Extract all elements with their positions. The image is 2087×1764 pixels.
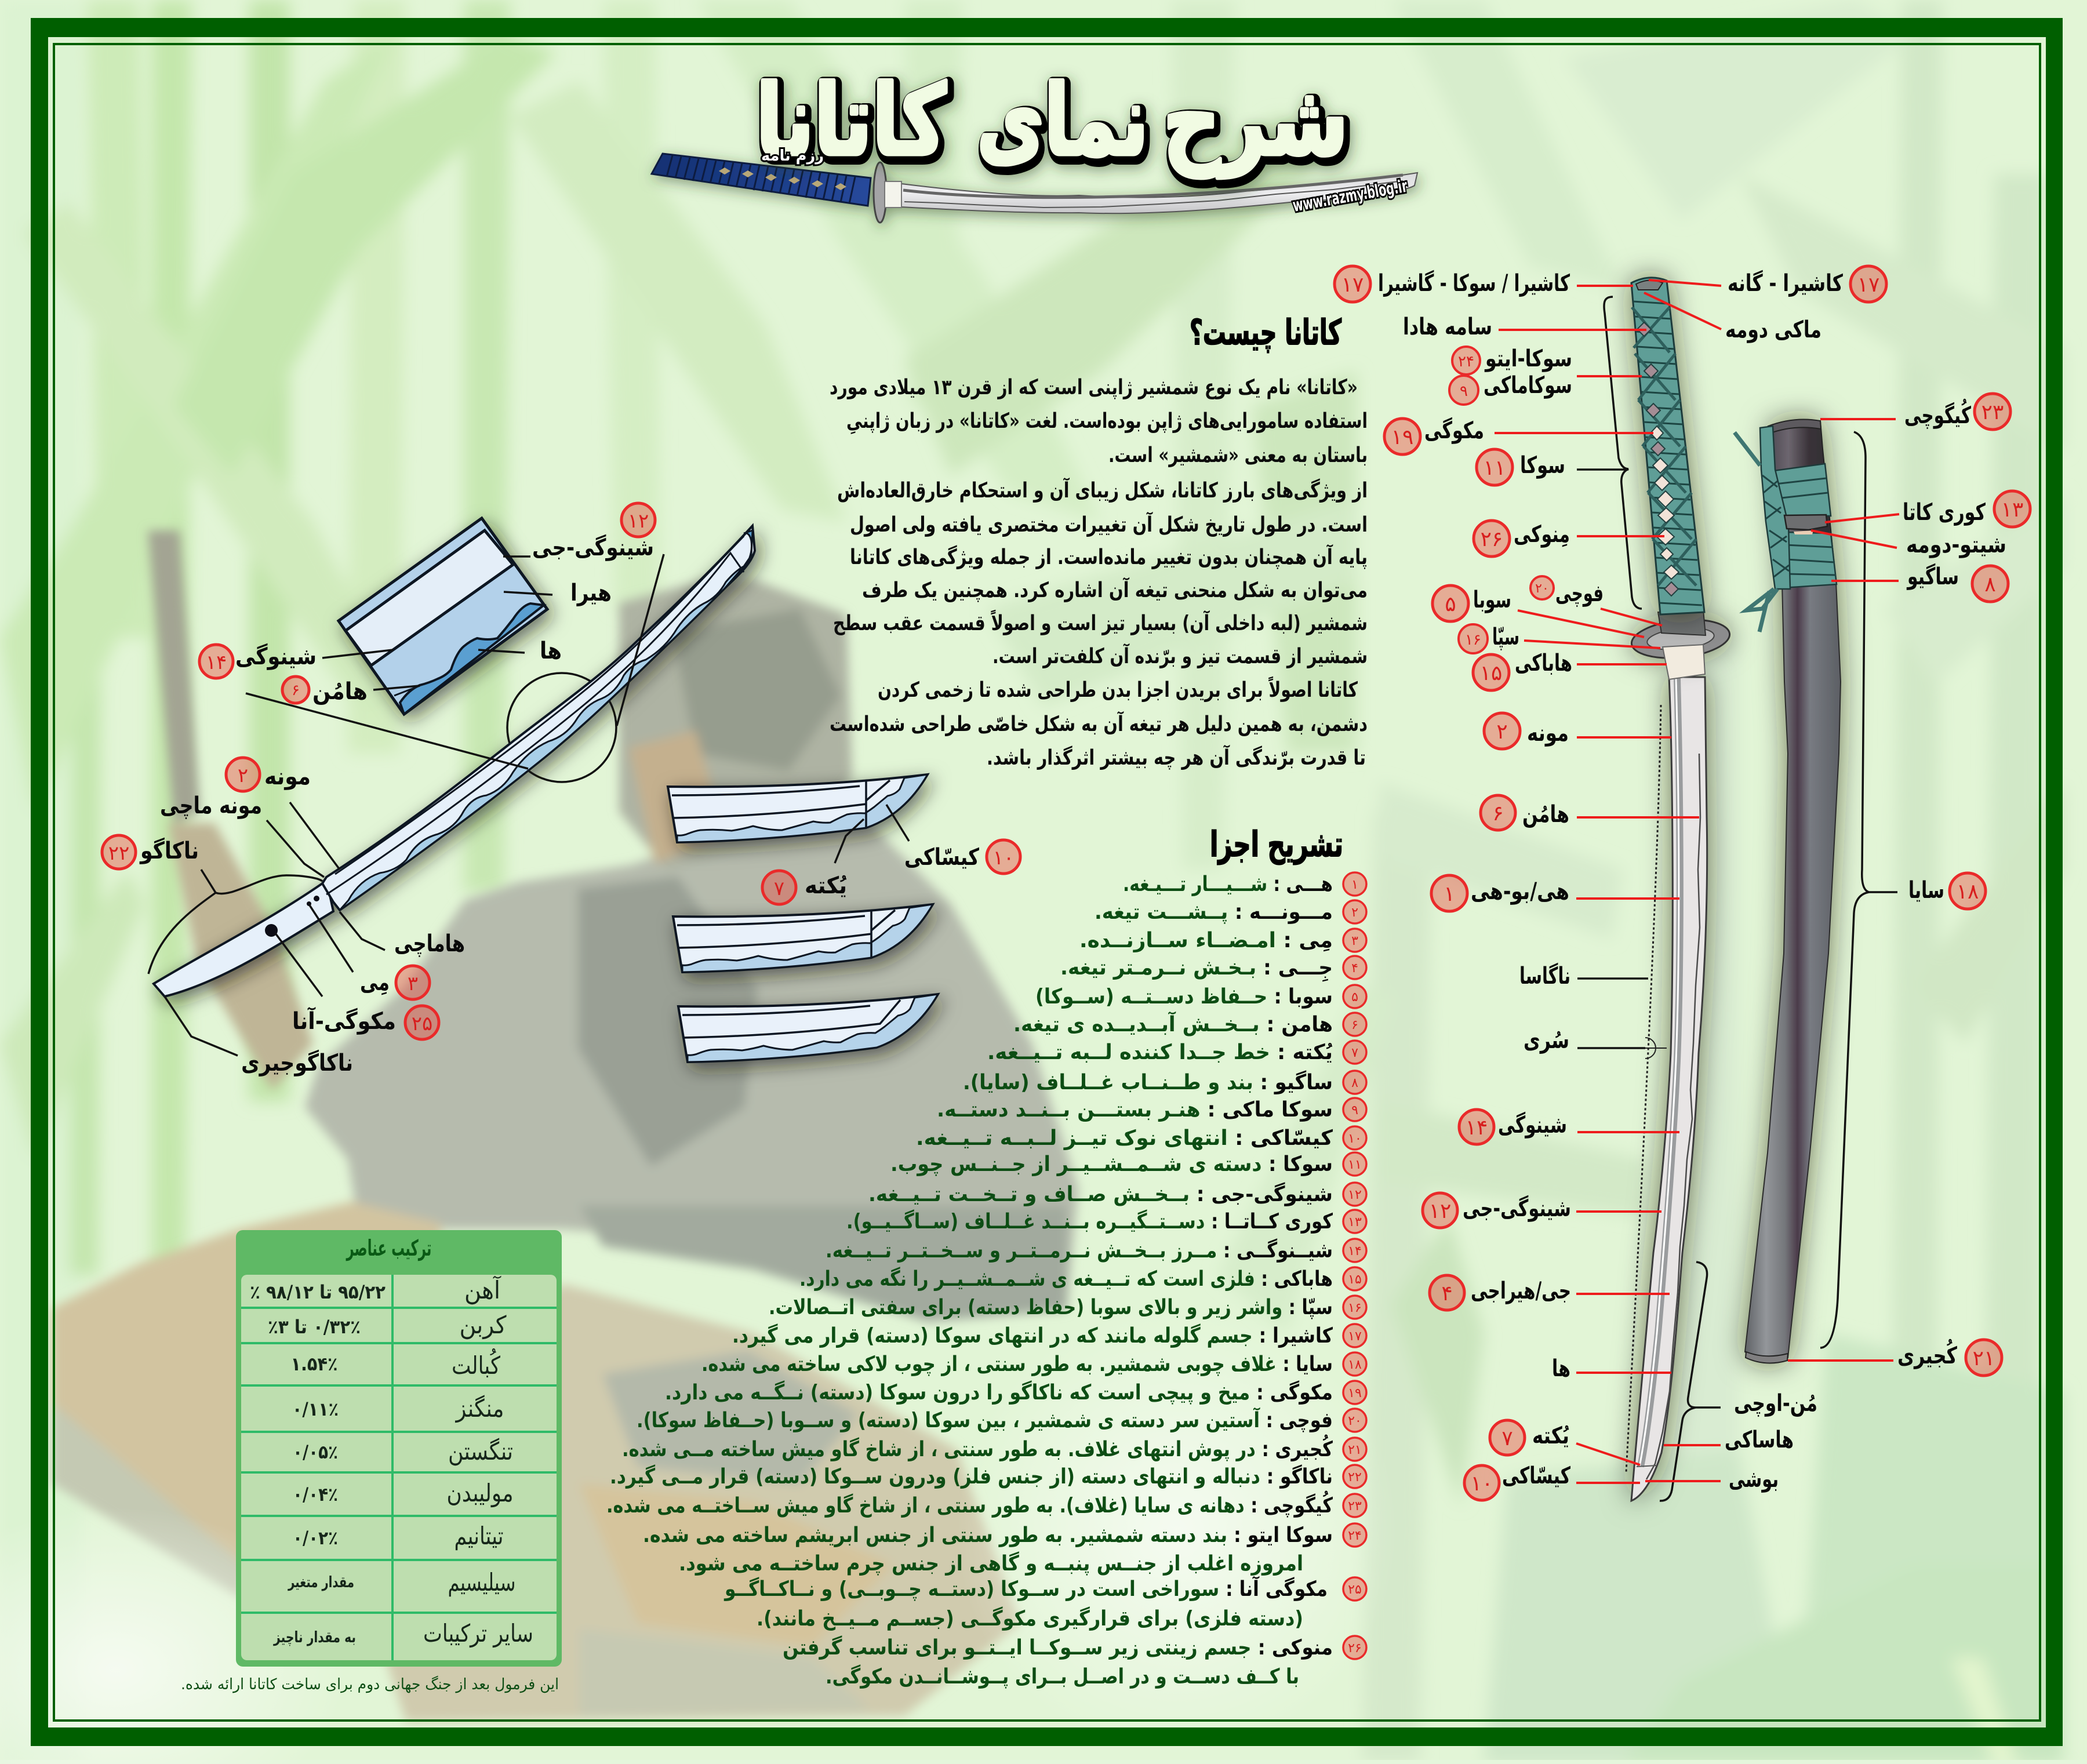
table rows: ۰/۳۲٪ تا ۳٪ <box>268 1316 361 1338</box>
table rows: به مقدار ناچیز <box>272 1629 356 1646</box>
kissaki blade 1 <box>668 774 928 842</box>
table rows: کُبالت <box>452 1348 500 1380</box>
label: mekugi 19 <box>1384 417 1484 454</box>
table rows: ۰/۱۱٪ <box>292 1398 339 1420</box>
diagram: tang and blade anatomy (left) <box>102 503 755 1076</box>
label: kissaki 10 right: ۱۰ <box>1471 1472 1493 1496</box>
label: mune machi: مونه ماچی <box>160 792 262 819</box>
parts list: سوکا ماکی : هنـر بستـــن بــنــد دستــه. <box>937 1098 1333 1122</box>
paragraph: what is katana: باستان به معنی «شمشیر» است. <box>1108 443 1368 467</box>
parts list: کیسّاکی : انتهای نوک تیــز لــبــه تــیــغه. <box>916 1126 1333 1150</box>
number badges column: ۲۳ <box>1348 1499 1362 1514</box>
label: menuki 26: مِنوکی <box>1514 521 1570 548</box>
label: shinogi 14 right: شینوگی <box>1498 1111 1567 1139</box>
parts list: سایا : غلاف چوبی شمشیر. به طور سنتی ، از چوب لاکی ساخته می شده. <box>701 1352 1333 1376</box>
label: habaki 15 <box>1473 650 1572 690</box>
parts list: کُیگوچی : دهانه ی سایا (غلاف). به طور سنتی ، از شاخ گاو میش ســاختــه می شده. <box>606 1490 1333 1518</box>
number badges column: ۱۴ <box>1348 1244 1362 1259</box>
background: white fade lower left <box>0 1507 348 1764</box>
title sword: blade <box>901 173 1417 213</box>
parts list <box>606 872 1366 1689</box>
label: tsuka-ito 24: سوکا-ایتو <box>1484 345 1572 372</box>
title sword: collar <box>885 181 901 208</box>
title: کاتانا <box>756 64 946 177</box>
paragraph: what is katana: شمشیر (لبه داخلی آن) بسیار تیز است و اصولاً قسمت عقب سطح <box>833 610 1368 635</box>
parts list: مکوگی آنا : سوراخی است در ســوکا (دستــه چــوبــی) و نــاکــاگــو <box>723 1576 1328 1601</box>
label: habaki 15: ۱۵ <box>1480 661 1502 685</box>
number badges column: ۲۱ <box>1348 1443 1362 1457</box>
label: kashira 17 left: ۱۷ <box>1341 273 1364 297</box>
label: mune 2 right: ۲ <box>1496 720 1508 744</box>
label: shinogi 14: ۱۴ <box>206 651 227 674</box>
label: sageo 8 <box>1907 563 2008 602</box>
katana nagasa dotted line <box>1626 705 1661 1472</box>
parts list: کاشیرا : جسم گلوله مانند که در انتهای سوکا (دسته) قرار می گیرد. <box>732 1323 1333 1348</box>
number badges column: ۶ <box>1351 1018 1358 1032</box>
parts list: سپّا : واشر زیر و بالای سوبا (حفاظ دسته) برای سفتی اتــصالات. <box>769 1296 1333 1319</box>
number badges column: ۹ <box>1351 1103 1358 1118</box>
label: hamachi: هاماچی <box>394 930 465 957</box>
background: white fade right of figure <box>957 1304 1397 1756</box>
title sword: handle wrap <box>667 155 855 203</box>
label: fuchi 20 <box>1530 576 1604 607</box>
table rows: ۹۵/۲۲ تا ۹۸/۱۲ ٪ <box>250 1281 386 1303</box>
number badges column <box>1343 872 1366 1659</box>
label: mon-uchi: مُن-اوچی <box>1734 1390 1817 1417</box>
table rows: آهن <box>464 1275 501 1304</box>
scabbard sageo cord <box>1735 426 1837 632</box>
title sword: blue handle <box>652 154 871 206</box>
parts list: کُجیری : در پوش انتهای غلاف. به طور سنتی ، از شاخ گاو میش ساخته مــی شده. <box>622 1434 1333 1461</box>
parts list: هامن : بــخــش آبــدیــده ی تیغه. <box>1013 1011 1333 1036</box>
paragraph: what is katana: از ویژگی‌های بارز کاتانا، شکل زیبای آن و استحکام خارق‌العاده‌اش <box>837 477 1368 503</box>
label: shinogi-ji 12: ۱۲ <box>628 510 649 533</box>
label: nakago 22 <box>102 835 199 869</box>
label: mekugi-ana 25 <box>292 1006 439 1039</box>
diagram: full katana with parts (right) <box>1335 266 2030 1501</box>
parts list: جِـــی : بـخـش نــرمـتر تیغه. <box>1060 956 1333 981</box>
number badges column: ۲۵ <box>1348 1583 1362 1597</box>
diagram: kissaki tips <box>668 774 1020 1062</box>
label: mune 2 right <box>1484 713 1569 749</box>
table rows: ۰/۰۲٪ <box>293 1527 338 1549</box>
label: shinogi 14 right: ۱۴ <box>1466 1116 1488 1140</box>
parts list: کوری کــاتــا : دســتــگیــره بــنــد غــلــاف (ســاگــیــو). <box>846 1209 1333 1234</box>
kissaki leaders <box>835 805 909 863</box>
number badges column: ۱۶ <box>1348 1301 1362 1315</box>
label: yokote 7 right: ۷ <box>1501 1427 1513 1450</box>
number badges column: ۴ <box>1351 961 1358 976</box>
table rows: ۰/۰۵٪ <box>293 1441 338 1463</box>
title: نمای <box>977 64 1148 177</box>
label: shinogi-ji 12 right <box>1423 1193 1571 1228</box>
katana guard tsuba <box>1630 615 1732 663</box>
table: element composition <box>236 1230 562 1667</box>
red leader lines <box>1495 280 1899 1483</box>
table rows: کربن <box>459 1311 507 1339</box>
label: shinogi-ji 12 right: شینوگی-جی <box>1463 1195 1571 1222</box>
label: tsuba 5: سوبا <box>1473 587 1511 613</box>
label: hamon 6: ۶ <box>292 682 300 699</box>
title sword: guard <box>874 162 886 223</box>
number badges column: ۱۹ <box>1348 1386 1362 1401</box>
title: نمای <box>979 67 1151 181</box>
label: hasaki: هاساکی <box>1725 1427 1794 1453</box>
label: sori: سُری <box>1524 1027 1569 1054</box>
label: kashira-gane 17 <box>1728 266 1886 302</box>
label: shinogi 14: شینوگی <box>235 643 317 670</box>
number badges column: ۱۳ <box>1348 1215 1362 1230</box>
site name small: رزم نامه <box>761 147 824 165</box>
long blade with tang <box>154 526 755 996</box>
label: ha 1: هی/بو-هی <box>1471 878 1569 905</box>
background: faded samurai figure <box>52 530 1078 1722</box>
label: nagasa: ناگاسا <box>1519 962 1570 990</box>
number badges column: ۱۸ <box>1348 1358 1362 1372</box>
label: mekugi-ana 25: ۲۵ <box>412 1012 432 1035</box>
title: کاتانا <box>758 67 948 181</box>
label: same hada: سامه هادا <box>1403 314 1492 340</box>
katana handle tsuka <box>1631 278 1704 614</box>
label: kojiri 21: کُجیری <box>1897 1339 1958 1369</box>
label: kurikata 13: ۱۳ <box>2001 498 2023 522</box>
number badges column: ۲ <box>1351 905 1358 920</box>
number badges column: ۷ <box>1351 1046 1358 1060</box>
label: tsuka-ito 24 <box>1452 345 1572 374</box>
label: kashira-gane 17: ۱۷ <box>1857 273 1879 297</box>
parts list: ناکاگو : دنباله و انتهای دسته (از جنس فلز) ودرون ســوکا (دسته) قرار مــی گیرد. <box>610 1464 1333 1489</box>
sori arc mark <box>1645 1038 1667 1059</box>
label: menuki 26 <box>1474 521 1570 557</box>
title <box>756 64 1351 181</box>
table rows: سایر ترکیبات <box>423 1619 533 1647</box>
parts list: سوبا : حــفاظ دســتــه (ســوکا) <box>1035 985 1333 1009</box>
label: tsuka 11: سوکا <box>1520 452 1565 479</box>
label: kashira 17 left: کاشیرا / سوکا - گاشیرا <box>1378 270 1570 297</box>
title sword: diamonds <box>719 168 846 190</box>
paragraph: what is katana <box>830 376 1368 770</box>
table rows: مولیبدن <box>446 1479 514 1507</box>
paragraph: what is katana: پایه آن همچنان بدون تغییر مانده‌است. از جمله ویژگی‌های کاتانا <box>850 544 1368 569</box>
table heading: ترکیب عناصر <box>346 1235 431 1261</box>
number badges column: ۸ <box>1351 1076 1358 1090</box>
number badges column: ۳ <box>1351 934 1358 948</box>
paragraph: what is katana: شمشیر از قسمت تیز و برّنده آن کلفت‌تر است. <box>992 643 1368 668</box>
label: mei 3: ۳ <box>408 972 418 995</box>
number badges column: ۲۲ <box>1348 1470 1362 1485</box>
label: hamon 6 right: هامُن <box>1522 801 1569 828</box>
table rows: منگنز <box>455 1394 504 1423</box>
label: tsuba 5: ۵ <box>1445 592 1456 616</box>
parts list: شیــنوگــی : مــرز بــخــش نــرمــتــر و ســخــتــر تــیــغه. <box>826 1238 1333 1263</box>
label: hamon 6: هامُن <box>312 678 368 705</box>
heading: what is katana: کاتانا چیست؟ <box>1190 312 1341 353</box>
number badges column: ۲۶ <box>1348 1641 1362 1656</box>
label: hamon 6 right <box>1481 795 1569 830</box>
table rows: مقدار متغیر <box>287 1574 354 1591</box>
parts list: مـــونـــه : پــشـــت تیغه. <box>1095 900 1333 924</box>
number badges column: ۱۰ <box>1348 1132 1362 1146</box>
label: shinogi-ji 12: شینوگی-جی <box>532 534 654 561</box>
label: mekugi 19: ۱۹ <box>1391 425 1413 449</box>
parts list: مِی : امـضــاء ســازنــده. <box>1079 929 1333 952</box>
label: kissaki 10 right <box>1464 1463 1571 1500</box>
site url: www.razmy.blog.ir <box>1291 176 1409 216</box>
label: nakago 22: ۲۲ <box>108 842 129 865</box>
label: fuchi 20: ۲۰ <box>1535 581 1549 596</box>
label: ha right: ها <box>1552 1355 1570 1382</box>
table rows <box>250 1275 533 1647</box>
label: yokote 7: یُکته <box>805 872 847 899</box>
label: tsukamaki 9 <box>1449 372 1572 405</box>
paragraph: what is katana: می‌توان به شکل منحنی تیغه آن اشاره کرد. همچنین یک طرف <box>862 577 1368 602</box>
label: mei 3: مِی <box>360 969 390 996</box>
label: kissaki 10: کیسّاکی <box>904 844 980 871</box>
heading: parts description: تشریح اجزا <box>1210 824 1343 865</box>
label: koiguchi 23: ۲۳ <box>1981 401 2004 424</box>
parts list: ساگیو : بند و طــنــاب غــلــاف (سایا). <box>963 1070 1333 1094</box>
label: kojiri 21: ۲۱ <box>1973 1347 1995 1370</box>
label: saya 18 <box>1908 873 1986 909</box>
label: yokote 7 <box>762 871 847 904</box>
label: tsuka-ito 24: ۲۴ <box>1458 353 1474 370</box>
label: saya 18: ۱۸ <box>1957 880 1979 904</box>
label: kashira 17 left <box>1335 266 1570 302</box>
label: nakago-jiri: ناکاگوجیری <box>241 1049 353 1076</box>
label: kojiri 21 <box>1897 1339 2002 1376</box>
parts list: فوچی : آستین سر دسته ی شمشیر ، بین سوکا (دسته) و ســوبا (حــفاظ سوکا). <box>637 1407 1333 1432</box>
label: ji 4 <box>1430 1275 1571 1310</box>
label: seppa 16: سپّا <box>1492 624 1519 650</box>
label: mune 2: مونه <box>264 763 311 790</box>
table footnote: این فرمول بعد از جنگ جهانی دوم برای ساخت کاتانا ارائه شده. <box>181 1675 559 1693</box>
label: sageo 8: ۸ <box>1984 573 1996 597</box>
table rows: تیتانیم <box>455 1522 503 1551</box>
scabbard saya <box>1745 419 1841 1363</box>
title: شرح <box>1165 67 1351 181</box>
label: mei 3 <box>360 966 430 999</box>
magnifier circle <box>507 673 616 782</box>
table inner panel <box>241 1275 557 1660</box>
label: koiguchi 23: کُیگوچی <box>1904 398 1972 429</box>
label: boshi: بوشی <box>1729 1466 1779 1493</box>
parts list: (دسته فلزی) برای قرارگیری مکوگــی (جســم مــیــخ مانند). <box>757 1606 1303 1631</box>
label: kissaki 10: ۱۰ <box>993 846 1014 870</box>
number badges column: ۲۴ <box>1348 1529 1362 1543</box>
label: ji 4: ۴ <box>1441 1282 1453 1305</box>
label: tsuba 5 <box>1432 585 1511 621</box>
title sword illustration <box>652 154 1417 223</box>
label: kashira-gane 17: کاشیرا - گانه <box>1728 270 1844 297</box>
label: tsukamaki 9: ۹ <box>1460 383 1468 400</box>
table grid <box>241 1275 557 1660</box>
label: nakago 22: ناکاگو <box>139 837 199 864</box>
katana fuchi collar <box>1658 610 1706 635</box>
paragraph: what is katana: است. در طول تاریخ شکل آن تغییرات مختصری یافته ولی اصول <box>850 511 1368 537</box>
number badges column: ۱۷ <box>1348 1329 1362 1344</box>
paragraph: what is katana: استفاده سامورایی‌های ژاپن بوده‌است. لغت «کاتانا» در زبان ژاپنیِ <box>846 409 1368 434</box>
table rows: سیلیسیم <box>448 1568 516 1597</box>
label: mune 2 <box>226 758 311 791</box>
parts list: شینوگی-جی : بــخــش صــاف و تــخــت تــیــغه. <box>868 1182 1333 1206</box>
label: menuki 26: ۲۶ <box>1481 528 1503 551</box>
paragraph: what is katana: تا قدرت برّندگی آن هر چه بیشتر اثرگذار باشد. <box>987 744 1366 770</box>
label: fuchi 20: فوچی <box>1555 580 1604 607</box>
number badges column: ۱۱ <box>1348 1158 1362 1172</box>
label: tsukamaki 9: سوکاماکی <box>1484 372 1572 399</box>
label: kissaki 10 right: کیسّاکی <box>1502 1463 1571 1489</box>
label: kurikata 13 <box>1903 491 2030 527</box>
paragraph: what is katana: کاتانا اصولاً برای بریدن اجزا بدن طراحی شده تا زخمی کردن <box>878 676 1358 702</box>
parts list: با کــف دســت و در اصــل بــرای پــوشــانــدن مکوگی. <box>826 1664 1299 1689</box>
label: hira: هیرا <box>570 580 612 606</box>
label: saya 18: سایا <box>1908 877 1944 904</box>
label: shinogi 14 <box>199 643 317 678</box>
label: sageo 8: ساگیو <box>1907 563 1959 590</box>
label: yokote 7 right: یُکته <box>1532 1423 1569 1449</box>
label: mune 2 right: مونه <box>1527 720 1569 747</box>
table rows: ۰/۰۴٪ <box>293 1483 338 1505</box>
label: mekugi-ana 25: مکوگی-آنا <box>292 1006 396 1035</box>
number badges column: ۱۲ <box>1348 1188 1362 1202</box>
label: hamon 6 <box>282 676 368 705</box>
parts list: هاباکی : فلزی است که تــیــغه ی شــمــشــیــر را نگه می دارد. <box>799 1267 1333 1291</box>
kissaki blade 3 <box>678 994 938 1062</box>
label: yokote 7: ۷ <box>774 877 784 900</box>
parts list: یُکته : خط جــدا کننده لــبه تــیــغه. <box>987 1041 1333 1064</box>
label: kissaki 10 <box>904 840 1020 874</box>
label: mune 2: ۲ <box>238 764 248 787</box>
label: shitodome: شیتو-دومه <box>1906 532 2006 558</box>
parts list: هـــی : شـــیـــار تـــیـغه. <box>1123 872 1333 896</box>
label: shinogi 14 right <box>1459 1110 1567 1144</box>
katana habaki collar <box>1663 645 1705 679</box>
katana blade <box>1631 677 1707 1501</box>
number badges column: ۵ <box>1351 990 1358 1005</box>
label: seppa 16: ۱۶ <box>1465 631 1481 649</box>
parts list: منوکی : جسم زینتی زیر ســوکــا ایــتــو برای تناسب گرفتن <box>783 1635 1333 1660</box>
parts list: مکوگی : میخ و پیچی است که ناکاگو را درون سوکا (دسته) نــگــه می دارد. <box>665 1380 1333 1405</box>
number badges column: ۱ <box>1351 878 1358 892</box>
label: tsuka 11 <box>1477 449 1565 485</box>
label: ha: ها <box>540 638 562 664</box>
kissaki blade 2 <box>673 904 933 972</box>
table outer panel <box>236 1230 562 1667</box>
paragraph: what is katana: «کاتانا» نام یک نوع شمشیر ژاپنی است که از قرن ۱۳ میلادی مورد <box>830 376 1358 399</box>
table rows: تنگستن <box>448 1437 513 1465</box>
label: habaki 15: هاباکی <box>1515 650 1572 676</box>
title: شرح <box>1163 64 1348 178</box>
number badges column: ۲۰ <box>1348 1414 1362 1428</box>
label: kurikata 13: کوری کاتا <box>1903 499 1986 526</box>
parts list: سوکا : دسته ی شــمــشــیــر از جــنــس چوب. <box>890 1152 1333 1176</box>
parts list: سوکا ایتو : بند دسته شمشیر. به طور سنتی از جنس ابریشم ساخته می شده. <box>643 1523 1333 1547</box>
leader lines <box>148 554 664 1056</box>
label: ha 1: ۱ <box>1444 882 1455 906</box>
label: ha 1 <box>1431 875 1569 911</box>
table rows: ۱.۵۴٪ <box>291 1353 337 1375</box>
label: ji 4: جی/هیراجی <box>1471 1278 1571 1304</box>
blade detail box <box>339 518 547 714</box>
number badges column: ۱۵ <box>1348 1272 1362 1287</box>
title sword: groove and hamon <box>903 175 1403 198</box>
braces and black leaders <box>1577 297 1897 1501</box>
paragraph: what is katana: دشمن، به همین دلیل هر تیغه آن به شکل خاصّی طراحی شده‌است <box>830 711 1368 736</box>
label: mekugi 19: مکوگی <box>1424 417 1484 444</box>
label: hamon 6 right: ۶ <box>1492 802 1504 825</box>
label: koiguchi 23 <box>1904 394 2010 430</box>
label: yokote 7 right <box>1490 1420 1569 1455</box>
label: shinogi-ji 12 <box>532 503 655 561</box>
label: seppa 16 <box>1459 624 1519 653</box>
parts list: امروزه اغلب از جنــس پنبــه و گاهی از جنس چرم ساختــه می شود. <box>679 1551 1303 1576</box>
label: tsuka 11: ۱۱ <box>1484 456 1506 480</box>
label: maki dome: ماکی دومه <box>1725 317 1821 343</box>
label: shinogi-ji 12 right: ۱۲ <box>1429 1199 1451 1223</box>
